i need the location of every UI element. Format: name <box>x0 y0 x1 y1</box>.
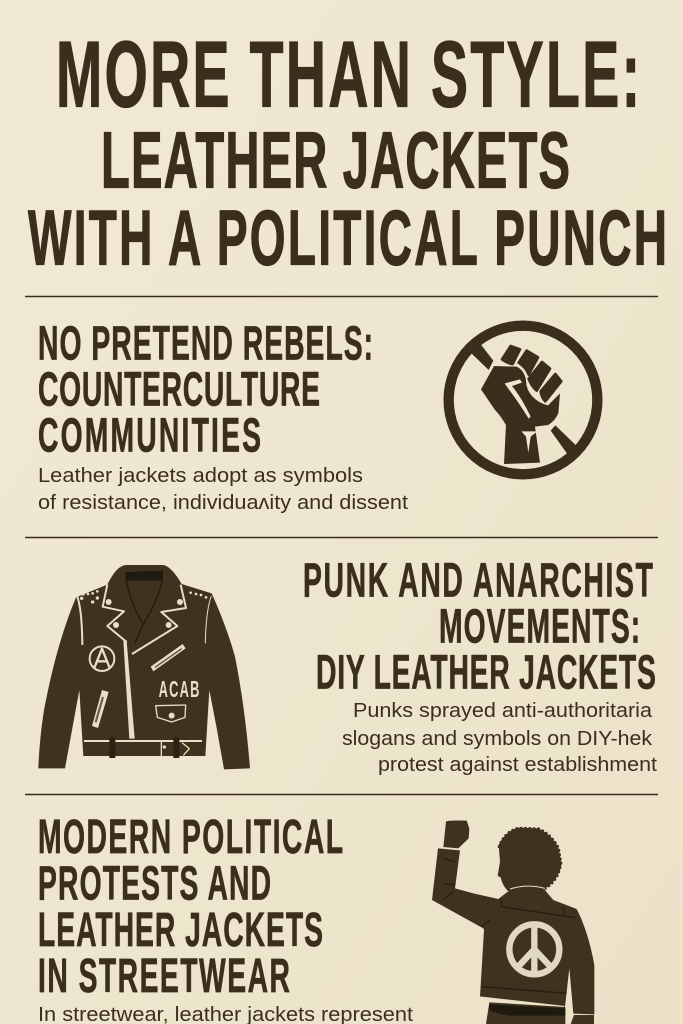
title: WITH A POLITICAL PUNCH <box>28 194 667 282</box>
icon: punk leather jacket: ACAB <box>159 676 199 702</box>
heading: modern political protests: LEATHER JACKETS <box>38 903 323 957</box>
title: MORE THAN STYLE: <box>56 22 640 127</box>
heading: punk and anarchist: MOVEMENTS: <box>439 600 640 653</box>
heading: no pretend rebels <box>38 317 373 462</box>
panel: punk and anarchist movements <box>38 554 657 776</box>
title <box>28 22 667 282</box>
heading: punk and anarchist <box>303 554 656 699</box>
heading: no pretend rebels: COMMUNITIES <box>38 409 261 462</box>
heading: modern political protests: MODERN POLITICAL <box>38 810 343 864</box>
panel: modern political protests <box>38 810 594 1024</box>
heading: punk and anarchist: DIY LEATHER JACKETS <box>316 646 656 699</box>
heading: punk and anarchist: PUNK AND ANARCHIST <box>303 554 653 607</box>
text block: resistance: of resistance, individuaʌity and dissent <box>38 492 408 514</box>
text block: resistance: Leather jackets adopt as symbols <box>38 465 363 487</box>
text block: punks: slogans and symbols on DIY-hek <box>342 728 653 750</box>
heading: modern political protests: PROTESTS AND <box>38 857 271 910</box>
icon: punk leather jacket <box>38 565 250 769</box>
panel: counterculture communities <box>38 317 597 514</box>
heading: modern political protests: IN STREETWEAR <box>38 949 290 1003</box>
title: LEATHER JACKETS <box>101 116 570 205</box>
text block: punks <box>342 700 657 776</box>
text block: punks: protest against establishment <box>378 754 657 776</box>
heading: no pretend rebels: NO PRETEND REBELS: <box>38 317 373 370</box>
heading: modern political protests <box>38 810 343 1003</box>
icon: protester with raised fist and peace sign jacket <box>432 820 594 1024</box>
heading: no pretend rebels: COUNTERCULTURE <box>38 363 320 416</box>
text block: resistance <box>38 465 408 514</box>
text block: punks: Punks sprayed anti-authoritaria <box>353 700 653 722</box>
icon: crossed-out raised fist <box>449 326 597 474</box>
